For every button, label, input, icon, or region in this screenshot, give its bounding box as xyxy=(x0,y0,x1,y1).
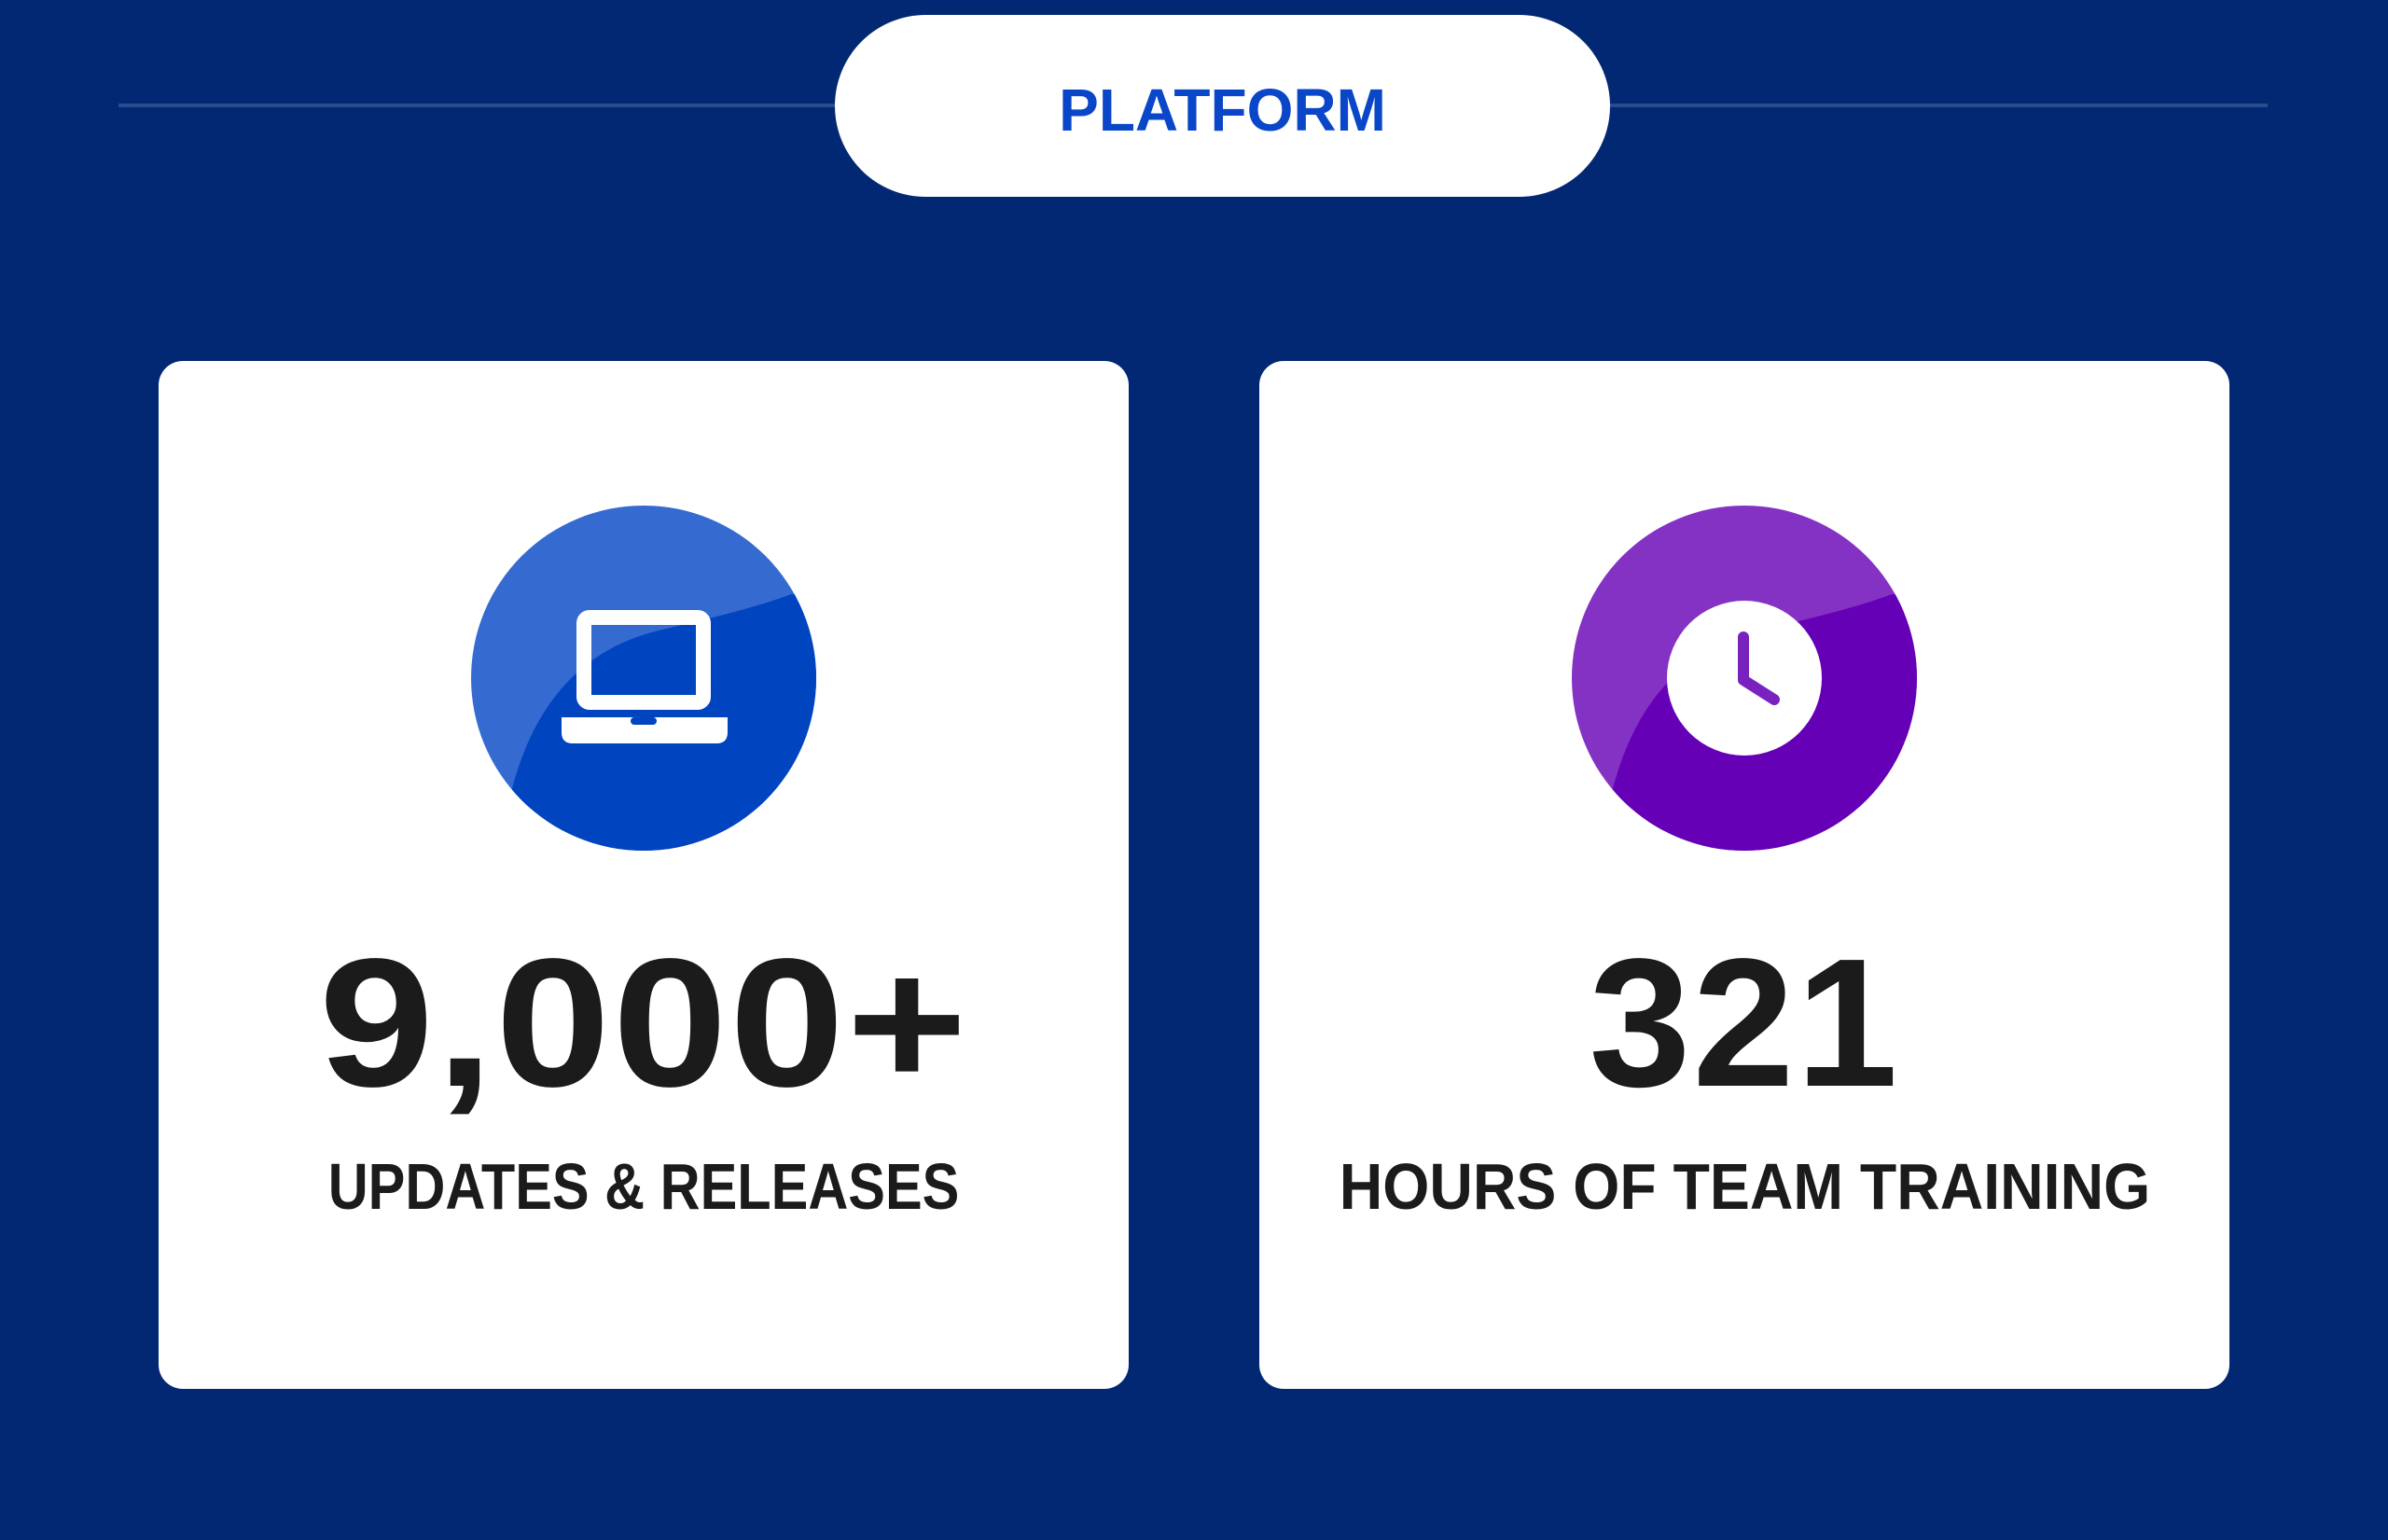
icon: laptop xyxy=(471,506,816,851)
title pill: PLATFORM xyxy=(1059,76,1386,144)
title pill xyxy=(835,15,1610,197)
label: UPDATES & RELEASES xyxy=(328,1150,959,1223)
number: 321 xyxy=(1589,921,1900,1125)
panel: training xyxy=(1259,361,2229,1389)
icon: clock xyxy=(1572,506,1917,851)
label: HOURS OF TEAM TRAINING xyxy=(1339,1150,2150,1223)
panel: updates xyxy=(159,361,1129,1389)
number: 9,000+ xyxy=(318,921,969,1125)
